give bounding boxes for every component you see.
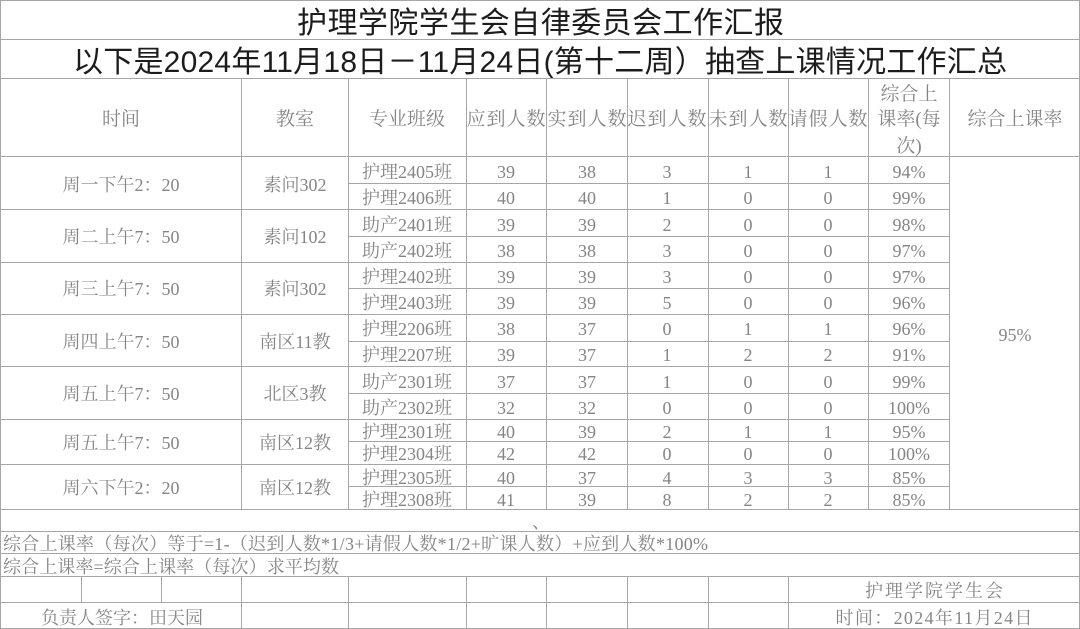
data rows: 96% <box>892 319 926 339</box>
formula notes: 综合上课率（每次）等于=1-（迟到人数*1/3+请假人数*1/2+旷课人数）+应到人数*100% <box>3 534 708 554</box>
table header: 教室 <box>276 108 314 130</box>
overall attendance rate: 95% <box>998 325 1032 345</box>
data rows: 97% <box>892 241 926 261</box>
data rows: 39 <box>578 490 596 510</box>
data rows: 32 <box>578 398 596 418</box>
data rows: 39 <box>497 215 515 235</box>
table header: 未到人数 <box>708 108 788 130</box>
data rows: 0 <box>744 293 752 313</box>
data rows: 37 <box>578 468 596 488</box>
time and classroom column: 南区12教 <box>259 477 331 498</box>
data rows: 38 <box>578 241 596 261</box>
data rows: 40 <box>497 188 515 208</box>
table header: 专业班级 <box>369 108 445 130</box>
formula notes <box>3 534 708 577</box>
data rows: 1 <box>662 345 672 365</box>
data rows: 1 <box>744 319 752 339</box>
data rows: 97% <box>892 267 926 287</box>
data rows: 32 <box>497 398 515 418</box>
table header: 迟到人数 <box>628 108 706 130</box>
subtitle: 以下是2024年11月18日－11月24日(第十二周）抽查上课情况工作汇总 <box>73 46 1007 79</box>
data rows: 0 <box>662 444 672 464</box>
data rows: 0 <box>744 444 752 464</box>
data rows: 38 <box>497 241 515 261</box>
data rows: 2 <box>744 490 752 510</box>
data rows: 2 <box>744 345 752 365</box>
data rows: 39 <box>497 162 515 182</box>
data rows: 助产2401班 <box>362 215 452 235</box>
data rows: 护理2207班 <box>362 345 452 365</box>
time and classroom column: 周五上午7：50 <box>62 433 180 453</box>
time and classroom column: 素问302 <box>264 279 326 299</box>
data rows: 0 <box>744 372 752 392</box>
data rows: 37 <box>578 319 596 339</box>
data rows: 40 <box>497 422 515 442</box>
time and classroom column: 素问302 <box>264 175 326 195</box>
data rows: 99% <box>892 188 926 208</box>
data rows: 0 <box>824 241 832 261</box>
data rows: 39 <box>497 267 515 287</box>
time and classroom column: 周三上午7：50 <box>62 279 180 299</box>
data rows: 38 <box>497 319 515 339</box>
data rows: 2 <box>662 422 672 442</box>
table header: 综合上 <box>880 83 938 105</box>
data rows: 40 <box>578 188 596 208</box>
data rows: 0 <box>824 372 832 392</box>
data rows: 94% <box>892 162 926 182</box>
title: 护理学院学生会自律委员会工作汇报 <box>297 7 784 40</box>
data rows: 41 <box>497 490 515 510</box>
data rows: 0 <box>744 188 752 208</box>
data rows: 100% <box>888 398 930 418</box>
issuer and date: 时间：2024年11月24日 <box>836 607 1032 628</box>
data rows: 1 <box>744 162 752 182</box>
data rows: 助产2402班 <box>362 241 452 261</box>
table header: 综合上课率 <box>967 108 1063 130</box>
data rows: 96% <box>892 293 926 313</box>
data rows: 3 <box>662 162 672 182</box>
data rows: 护理2403班 <box>362 293 452 313</box>
data rows: 0 <box>662 398 672 418</box>
data rows: 99% <box>892 372 926 392</box>
time and classroom column: 周六下午2：20 <box>62 478 180 498</box>
data rows: 护理2405班 <box>362 162 452 182</box>
table header: 应到人数 <box>466 108 546 130</box>
time and classroom column: 南区11教 <box>259 331 331 352</box>
data rows: 100% <box>888 444 930 464</box>
data rows: 0 <box>662 319 672 339</box>
stray mark: 、 <box>532 512 550 532</box>
data rows: 1 <box>824 422 832 442</box>
data rows: 2 <box>824 490 832 510</box>
signature: 负责人签字：田天园 <box>41 608 203 628</box>
data rows: 0 <box>824 267 832 287</box>
time and classroom column: 南区12教 <box>259 432 331 453</box>
data rows: 85% <box>892 468 926 488</box>
data rows: 护理2402班 <box>362 267 452 287</box>
formula notes: 综合上课率=综合上课率（每次）求平均数 <box>3 557 339 577</box>
table header: 时间 <box>102 108 140 130</box>
data rows: 37 <box>578 345 596 365</box>
data rows: 护理2308班 <box>362 490 452 510</box>
issuer and date: 护理学院学生会 <box>865 581 1003 601</box>
data rows: 0 <box>744 398 752 418</box>
data rows: 0 <box>744 267 752 287</box>
data rows: 护理2304班 <box>362 444 452 464</box>
data rows: 护理2301班 <box>362 422 452 442</box>
data rows: 1 <box>662 188 672 208</box>
data rows: 3 <box>662 267 672 287</box>
table header: 实到人数 <box>548 108 626 130</box>
data rows: 37 <box>578 372 596 392</box>
time and classroom column: 周二上午7：50 <box>62 227 180 247</box>
time and classroom column: 周四上午7：50 <box>62 332 180 352</box>
data rows: 40 <box>497 468 515 488</box>
data rows: 4 <box>662 468 672 488</box>
data rows: 0 <box>824 215 832 235</box>
data rows: 0 <box>824 293 832 313</box>
data rows: 8 <box>662 490 672 510</box>
data rows: 5 <box>662 293 672 313</box>
time and classroom column: 素问102 <box>264 227 326 247</box>
data rows: 0 <box>744 215 752 235</box>
data rows: 0 <box>824 398 832 418</box>
data rows: 0 <box>824 188 832 208</box>
data rows: 39 <box>578 215 596 235</box>
time and classroom column: 北区3教 <box>264 384 326 404</box>
data rows: 37 <box>497 372 515 392</box>
table header: 请假人数 <box>788 108 868 130</box>
table header: 次) <box>896 135 922 157</box>
data rows: 0 <box>744 241 752 261</box>
table header <box>102 83 1063 157</box>
data rows: 助产2302班 <box>362 398 452 418</box>
data rows: 39 <box>578 293 596 313</box>
data rows: 1 <box>662 372 672 392</box>
data rows: 39 <box>578 267 596 287</box>
table header: 课率(每 <box>877 108 941 130</box>
data rows: 39 <box>497 293 515 313</box>
data rows: 98% <box>892 215 926 235</box>
data rows: 95% <box>892 422 926 442</box>
data rows: 3 <box>744 468 752 488</box>
data rows: 1 <box>824 162 832 182</box>
data rows: 85% <box>892 490 926 510</box>
data rows: 38 <box>578 162 596 182</box>
data rows: 39 <box>497 345 515 365</box>
time and classroom column: 周五上午7：50 <box>62 384 180 404</box>
data rows: 0 <box>824 444 832 464</box>
data rows <box>362 162 930 510</box>
data rows: 42 <box>578 444 596 464</box>
data rows: 39 <box>578 422 596 442</box>
data rows: 3 <box>824 468 832 488</box>
data rows: 3 <box>662 241 672 261</box>
data rows: 1 <box>744 422 752 442</box>
data rows: 2 <box>824 345 832 365</box>
time and classroom column <box>62 175 331 498</box>
data rows: 护理2206班 <box>362 319 452 339</box>
data rows: 91% <box>892 345 926 365</box>
data rows: 助产2301班 <box>362 372 452 392</box>
data rows: 42 <box>497 444 515 464</box>
time and classroom column: 周一下午2：20 <box>62 175 180 195</box>
data rows: 护理2406班 <box>362 188 452 208</box>
issuer and date <box>836 581 1032 628</box>
data rows: 2 <box>662 215 672 235</box>
data rows: 1 <box>824 319 832 339</box>
data rows: 护理2305班 <box>362 468 452 488</box>
